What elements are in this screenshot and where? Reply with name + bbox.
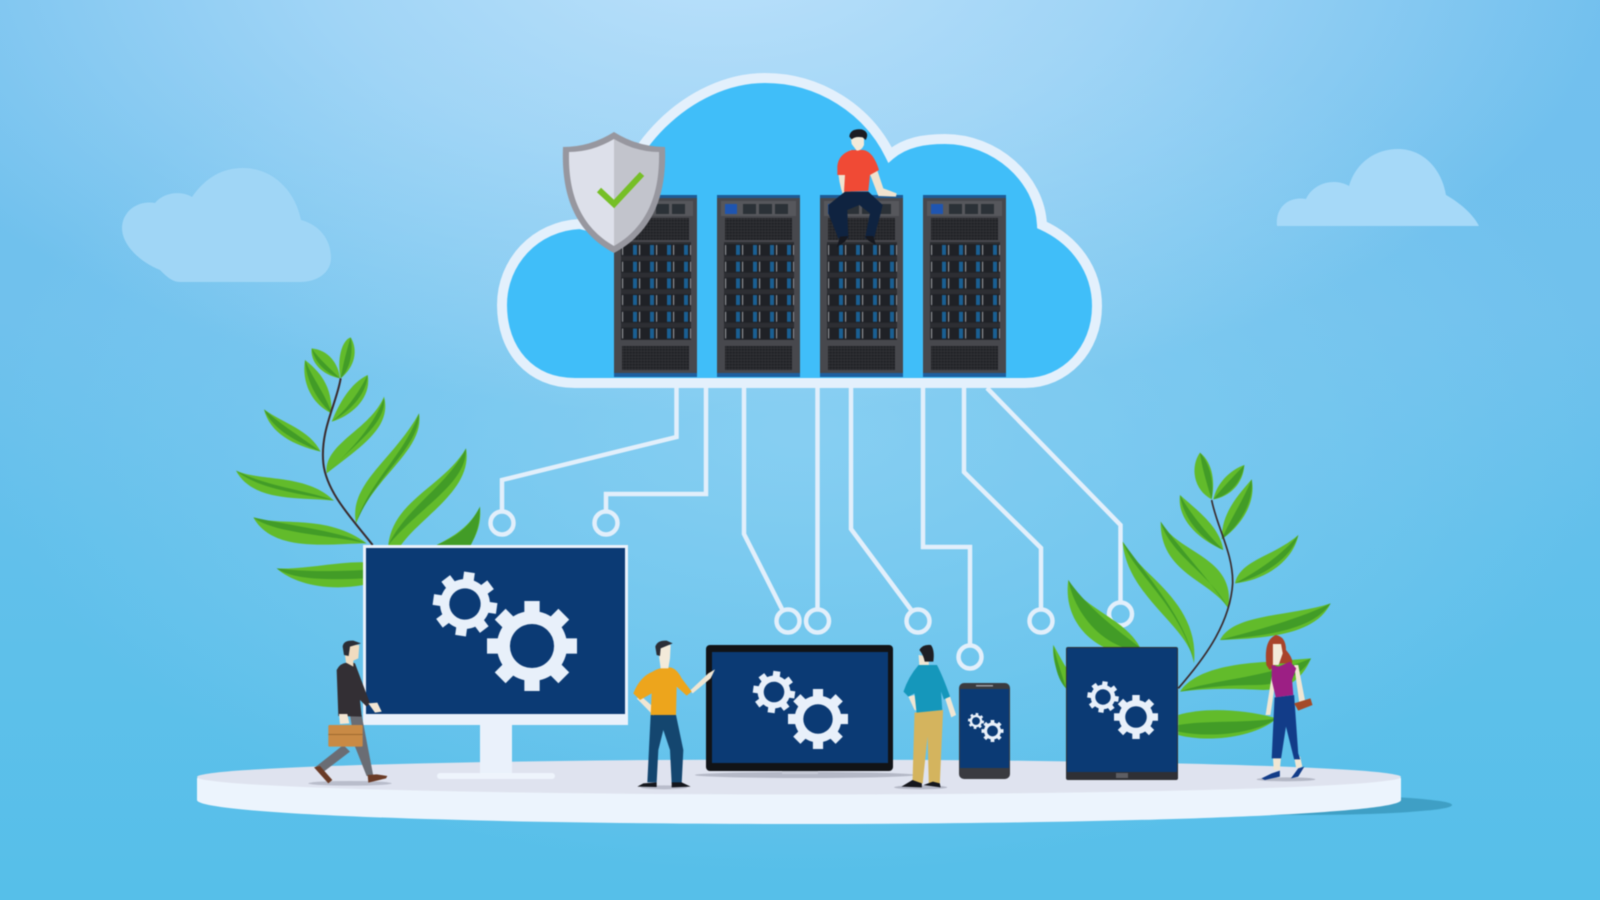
icon: security shield with check [563, 132, 665, 253]
icon: gears on phone [967, 712, 1004, 742]
server racks [614, 195, 1006, 377]
person: man in teal shirt [894, 645, 956, 789]
icon: gears on laptop [750, 668, 848, 749]
background cloud right [1277, 149, 1479, 226]
plant left [236, 337, 480, 587]
plant right [1053, 453, 1331, 739]
tablet [1066, 647, 1178, 780]
background cloud left [122, 168, 331, 282]
desktop monitor [363, 545, 628, 779]
laptop [695, 645, 915, 778]
person: man in yellow sweater [633, 641, 715, 789]
icon: gears on monitor [429, 568, 577, 691]
platform shadow [1152, 795, 1452, 815]
person: man in red sitting on server [828, 129, 897, 247]
smartphone [959, 683, 1010, 779]
person: woman in purple top [1257, 635, 1315, 781]
platform [197, 760, 1401, 824]
person: businessman with briefcase [308, 641, 392, 786]
main cloud [502, 78, 1097, 383]
connector lines with node circles [490, 388, 1132, 668]
icon: gears on tablet [1085, 679, 1158, 739]
